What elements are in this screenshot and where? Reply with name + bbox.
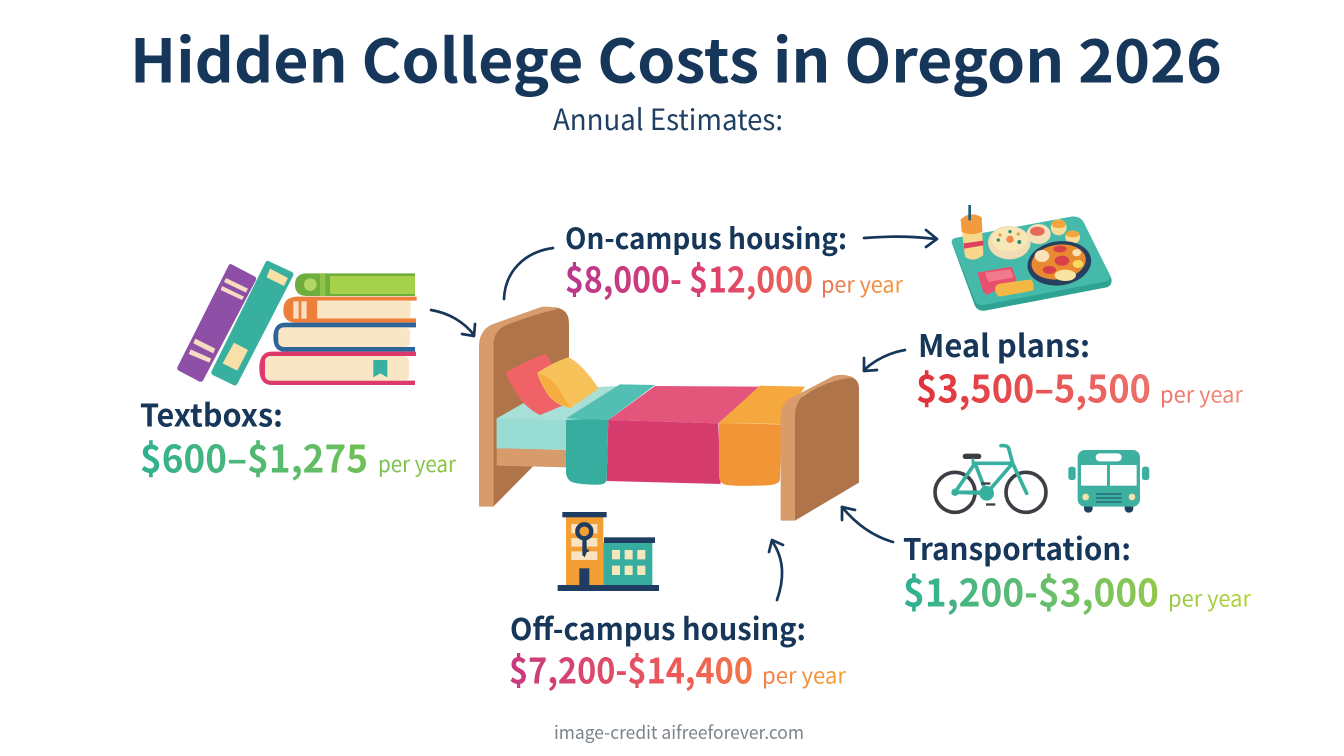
icon: bed <box>479 307 859 521</box>
icon: bus <box>1068 450 1149 513</box>
arrow: off-campus to bed <box>769 540 783 600</box>
panel: meal plans cost <box>916 321 1243 414</box>
arrow: transportation to bed <box>842 507 893 542</box>
heading: textbooks: Textboxs: <box>140 390 283 436</box>
icon: stack of books <box>177 261 417 385</box>
unit: meal plans: per year <box>1160 378 1243 410</box>
arrow: books to bed <box>431 310 475 336</box>
heading: off-campus housing: Off-campus housing: <box>510 605 806 649</box>
unit: transportation: per year <box>1168 582 1251 614</box>
icon: meal tray <box>952 205 1112 311</box>
title: Hidden College Costs in Oregon 2026 <box>130 14 1222 100</box>
arrow: to bed from meal plans <box>864 350 905 371</box>
image credit: image-credit aifreeforever.com <box>554 719 804 745</box>
icon: apartment buildings with key <box>558 512 659 591</box>
heading: transportation: Transportation: <box>903 525 1131 569</box>
panel: transportation cost <box>903 525 1251 618</box>
amount: off-campus housing: $7,200-$14,400 <box>509 642 753 694</box>
amount: meal plans: $3,500–5,500 <box>916 358 1151 414</box>
heading: meal plans: Meal plans: <box>918 321 1090 366</box>
subtitle: Annual Estimates: <box>553 97 783 139</box>
unit: textbooks: per year <box>378 447 456 479</box>
amount: transportation: $1,200-$3,000 <box>903 562 1159 618</box>
arrow: to meal tray <box>864 230 937 247</box>
unit: on-campus housing: per year <box>821 268 903 300</box>
amount: textbooks: $600–$1,275 <box>140 428 368 484</box>
panel: on-campus housing cost <box>565 216 903 304</box>
icon: bicycle <box>935 446 1046 512</box>
panel: off-campus housing cost <box>509 605 846 694</box>
panel: textbooks cost <box>140 390 456 484</box>
unit: off-campus housing: per year <box>762 658 846 690</box>
arrow: on-campus curve to bed <box>504 248 553 299</box>
heading: on-campus housing: On-campus housing: <box>565 216 847 258</box>
amount: on-campus housing: $8,000- $12,000 <box>565 252 813 304</box>
